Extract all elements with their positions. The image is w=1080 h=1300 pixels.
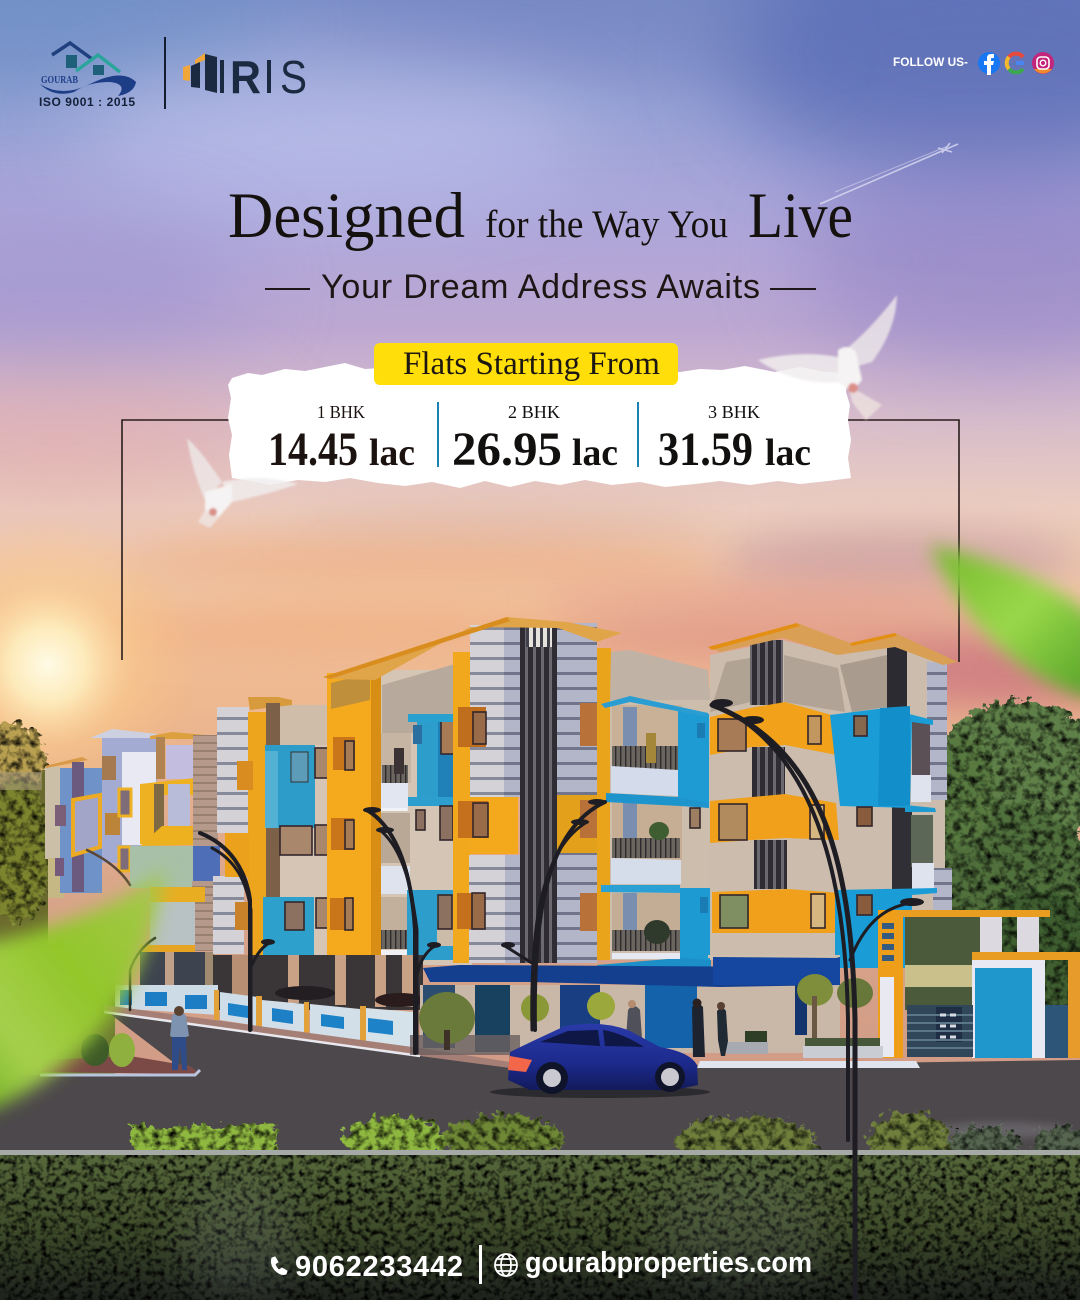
central tower xyxy=(323,617,622,963)
subheading: Your Dream Address Awaits xyxy=(321,268,760,306)
price: 3 BHK xyxy=(658,402,811,476)
trees right xyxy=(900,700,1080,1050)
contact bar: gourabproperties.com xyxy=(525,1247,812,1279)
icon: globe xyxy=(495,1254,517,1276)
headline: Live xyxy=(748,180,853,252)
Gourab logo: GOURAB xyxy=(41,75,78,86)
ground floor xyxy=(213,955,840,1053)
IRIS logo: R xyxy=(230,51,261,103)
leaf top right xyxy=(930,545,1080,700)
hedge foreground xyxy=(0,1112,1080,1300)
trees left xyxy=(0,722,52,1070)
icon: google xyxy=(1007,54,1024,72)
IRIS logo: S xyxy=(280,51,307,103)
price: 2 BHK: 2 BHK xyxy=(508,402,560,422)
contact bar xyxy=(271,1245,812,1284)
sun glow xyxy=(0,515,198,815)
distant building xyxy=(45,729,220,985)
frame outline xyxy=(122,420,959,662)
logo divider xyxy=(164,37,166,109)
dove right xyxy=(758,295,897,420)
icon: facebook xyxy=(978,52,1000,75)
Gourab logo xyxy=(39,43,136,109)
leaf bottom left xyxy=(0,868,165,1115)
price: 2 BHK: 26.95 xyxy=(452,423,562,476)
blue car xyxy=(508,1024,698,1094)
plants near building xyxy=(81,974,883,1067)
follow us xyxy=(893,52,1054,75)
price: 3 BHK: 31.59 xyxy=(658,423,753,476)
IRIS logo xyxy=(183,51,307,103)
price: 2 BHK: lac xyxy=(572,432,618,474)
right tower xyxy=(708,623,958,968)
price: 3 BHK: lac xyxy=(765,432,811,474)
contact bar: 9062233442 xyxy=(295,1251,463,1283)
headline: Designed xyxy=(228,180,465,252)
price: 1 BHK xyxy=(268,402,415,476)
center-left wall and balconies xyxy=(378,664,472,965)
middle balcony wing xyxy=(597,650,712,972)
dove left xyxy=(187,438,298,528)
apartment building xyxy=(113,617,1080,1058)
torn paper price panel xyxy=(228,343,851,488)
icon: instagram xyxy=(1032,52,1054,74)
orange block xyxy=(327,673,381,957)
price: 2 BHK xyxy=(452,402,618,476)
price: 1 BHK: lac xyxy=(369,432,415,474)
gate and boundary wall xyxy=(113,910,1080,1058)
Gourab logo: ISO 9001 : 2015 xyxy=(39,95,135,109)
price: 1 BHK: 14.45 xyxy=(268,423,358,476)
headline: for the Way You xyxy=(485,203,728,246)
price: 1 BHK: 1 BHK xyxy=(317,402,365,422)
headline xyxy=(228,180,853,252)
airplane contrail xyxy=(820,143,958,204)
price: 3 BHK: 3 BHK xyxy=(708,402,760,422)
callout badge: Flats Starting From xyxy=(403,346,660,382)
street lamps xyxy=(87,699,924,1300)
road and pavement xyxy=(0,950,1080,1165)
people xyxy=(170,998,728,1070)
follow us: FOLLOW US- xyxy=(893,55,968,69)
icon: phone xyxy=(271,1257,287,1274)
left wing xyxy=(213,697,330,958)
